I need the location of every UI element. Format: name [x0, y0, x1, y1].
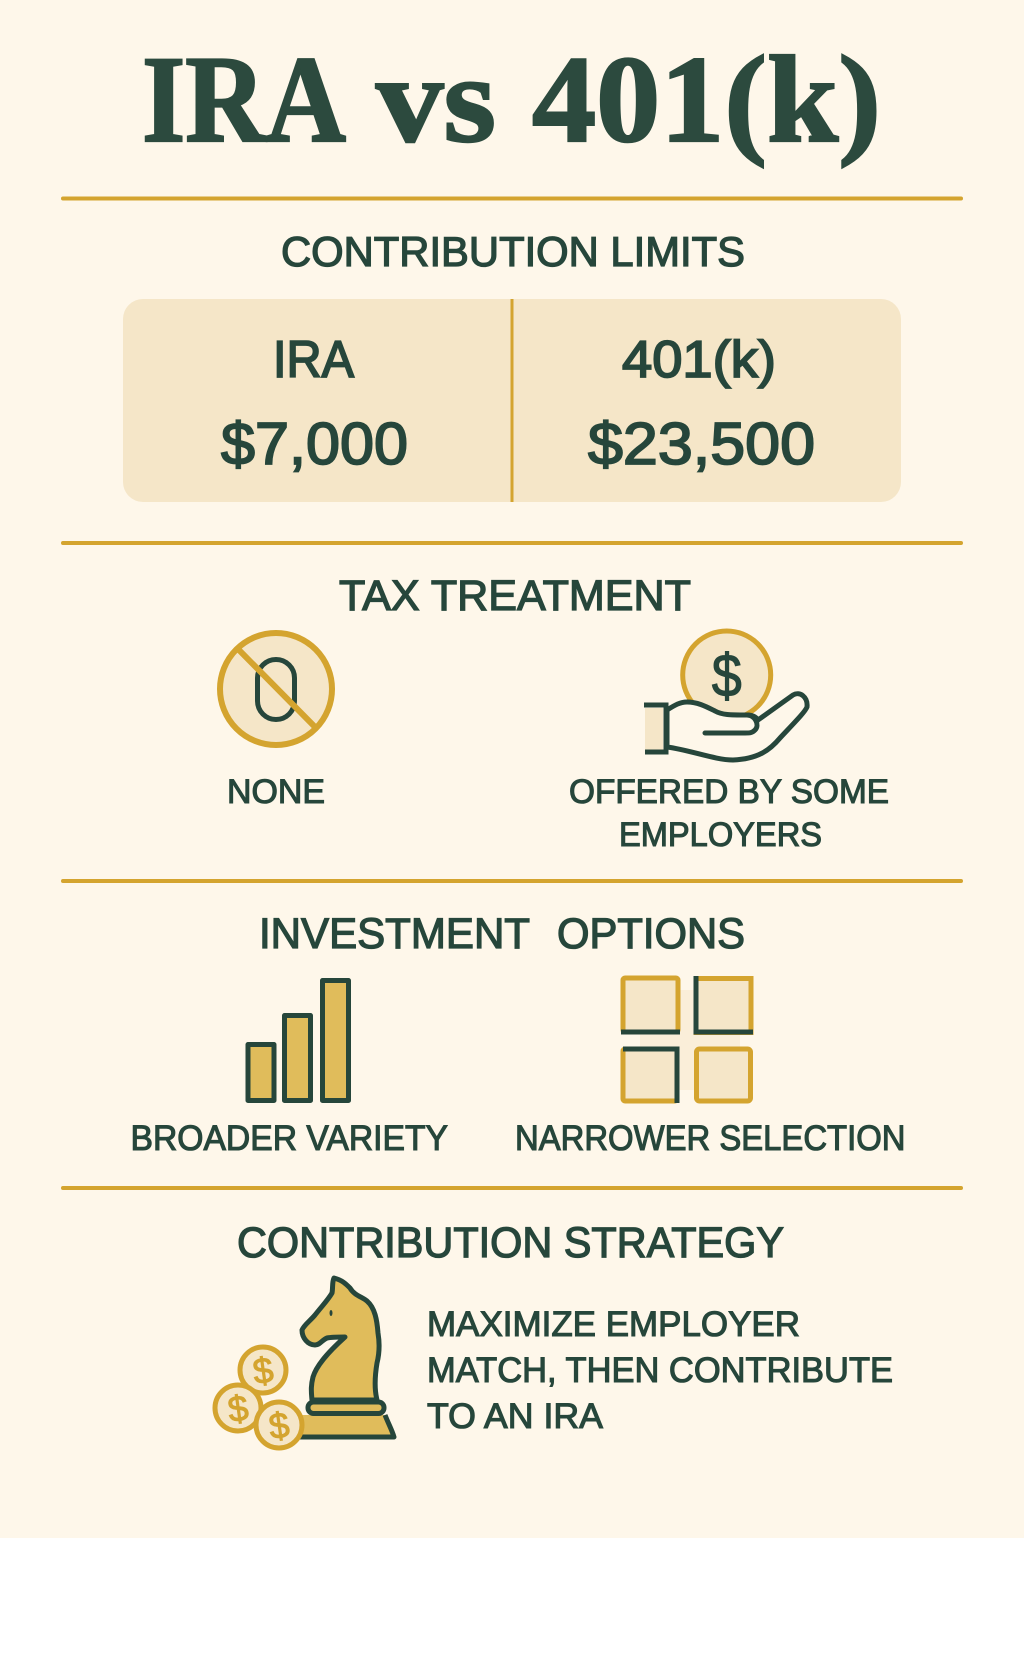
title: IRA [142, 31, 346, 168]
heading: contribution limits: CONTRIBUTION LIMITS [281, 228, 745, 275]
icon: hand holding coin [644, 631, 807, 760]
coin: $ [250, 1349, 276, 1392]
icon: four-tile grid [621, 976, 753, 1103]
label: offered by some employers: EMPLOYERS [619, 816, 822, 854]
IRA label: IRA [273, 331, 354, 389]
label: narrower selection: NARROWER SELECTION [515, 1119, 906, 1158]
coin: $ [266, 1404, 292, 1447]
coin [215, 1385, 261, 1431]
text block: strategy [427, 1305, 893, 1436]
title [142, 31, 881, 168]
text block: strategy: TO AN IRA [427, 1397, 604, 1436]
coin [240, 1347, 286, 1393]
heading: investment options: INVESTMENT [259, 910, 530, 958]
label: broader variety: BROADER VARIETY [130, 1119, 448, 1158]
coin [256, 1402, 302, 1448]
text block: strategy: MATCH, THEN CONTRIBUTE [427, 1351, 893, 1390]
heading: tax treatment: TAX TREATMENT [339, 572, 691, 620]
coin: $ [225, 1387, 251, 1430]
panel: contribution limits [123, 299, 901, 502]
icon: bar chart [248, 980, 348, 1100]
title: 401(k) [532, 31, 881, 168]
heading: investment options [259, 910, 745, 958]
heading: investment options: OPTIONS [557, 910, 745, 958]
label: offered by some employers: OFFERED BY SOME [569, 773, 889, 811]
401(k) amount: $23,500 [588, 411, 815, 477]
label: none: NONE [227, 773, 325, 811]
icon: crossed-out zero [220, 633, 332, 745]
label: offered by some employers [569, 773, 889, 854]
IRA amount: $7,000 [221, 411, 408, 477]
heading: contribution strategy: CONTRIBUTION STRATEGY [237, 1219, 784, 1267]
icon: chess knight with coins [215, 1278, 394, 1448]
401(k) label: 401(k) [622, 331, 776, 389]
title: vs [376, 31, 496, 168]
icon: hand holding coin: $ [712, 642, 742, 709]
text block: strategy: MAXIMIZE EMPLOYER [427, 1305, 800, 1344]
